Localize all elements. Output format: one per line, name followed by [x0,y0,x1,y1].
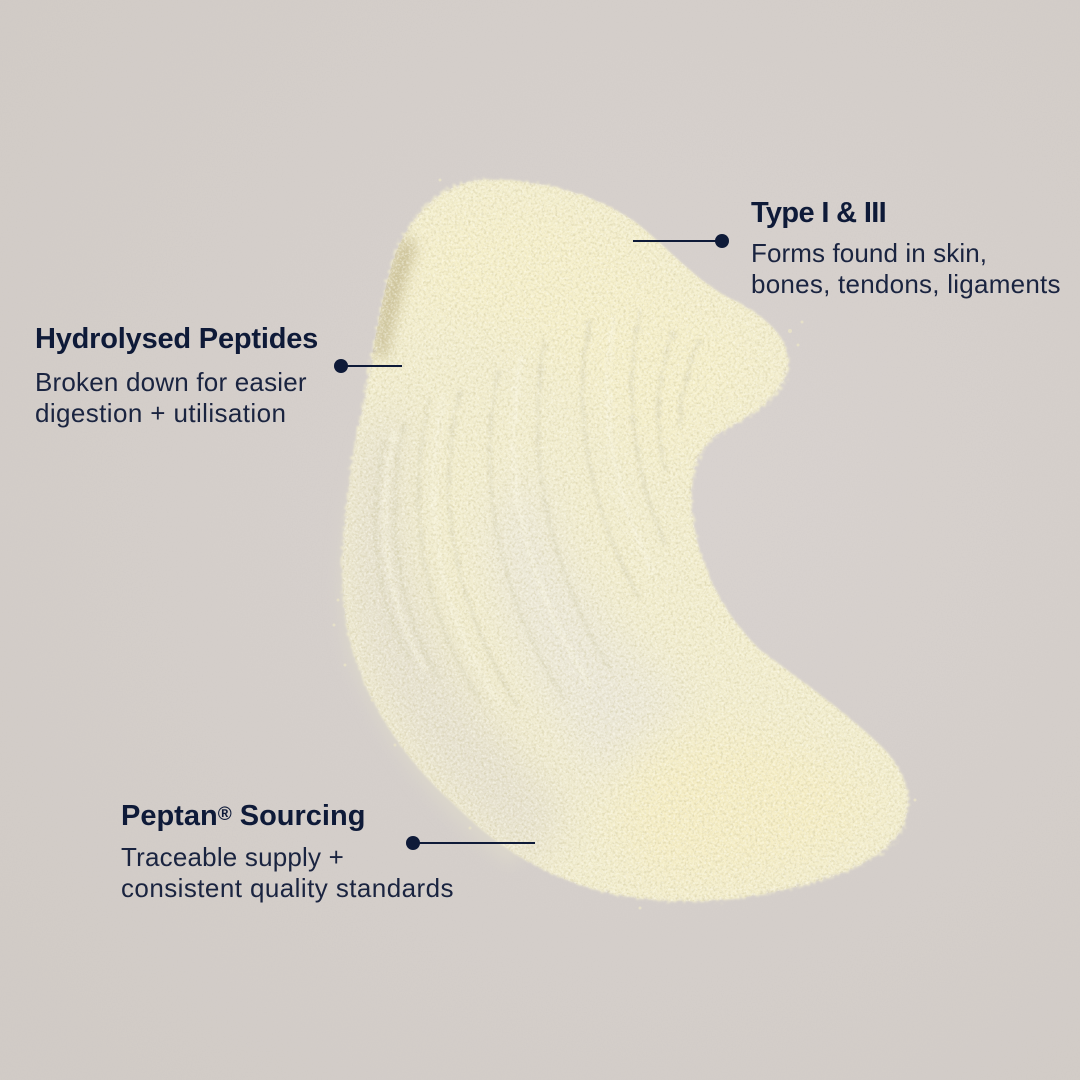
callout: Peptan Sourcing [121,800,535,903]
connector dot [334,359,348,373]
ridges [375,310,700,710]
connector dot [406,836,420,850]
heading: Peptan® Sourcing [121,800,365,832]
pale left fade [351,452,548,844]
dark left top edge [374,235,416,358]
text: Forms found in skin, [751,238,987,268]
heading: Type I & III [751,197,886,229]
text: bones, tendons, ligaments [751,269,1061,299]
connector dot [715,234,729,248]
text [35,367,307,428]
text: consistent quality standards [121,873,454,903]
warm top [400,199,770,480]
pale centre band [519,550,646,742]
ridge highlights [385,315,655,705]
powder shading [342,180,908,902]
text: digestion + utilisation [35,398,286,428]
connector line [412,842,535,844]
callout: Hydrolysed Peptides [35,323,402,428]
text: Traceable supply + [121,842,344,872]
scattered powder edge [341,430,570,865]
heading: Hydrolysed Peptides [35,323,318,355]
powder shape [343,180,908,901]
callout: Type I & III [633,197,1061,299]
connector line [633,240,721,242]
connector line [340,365,402,367]
text: Broken down for easier [35,367,307,397]
warm bottom [638,758,839,858]
powder swipe illustration [332,178,916,910]
stray grains [332,178,916,910]
text [751,238,1061,299]
text [121,842,454,903]
